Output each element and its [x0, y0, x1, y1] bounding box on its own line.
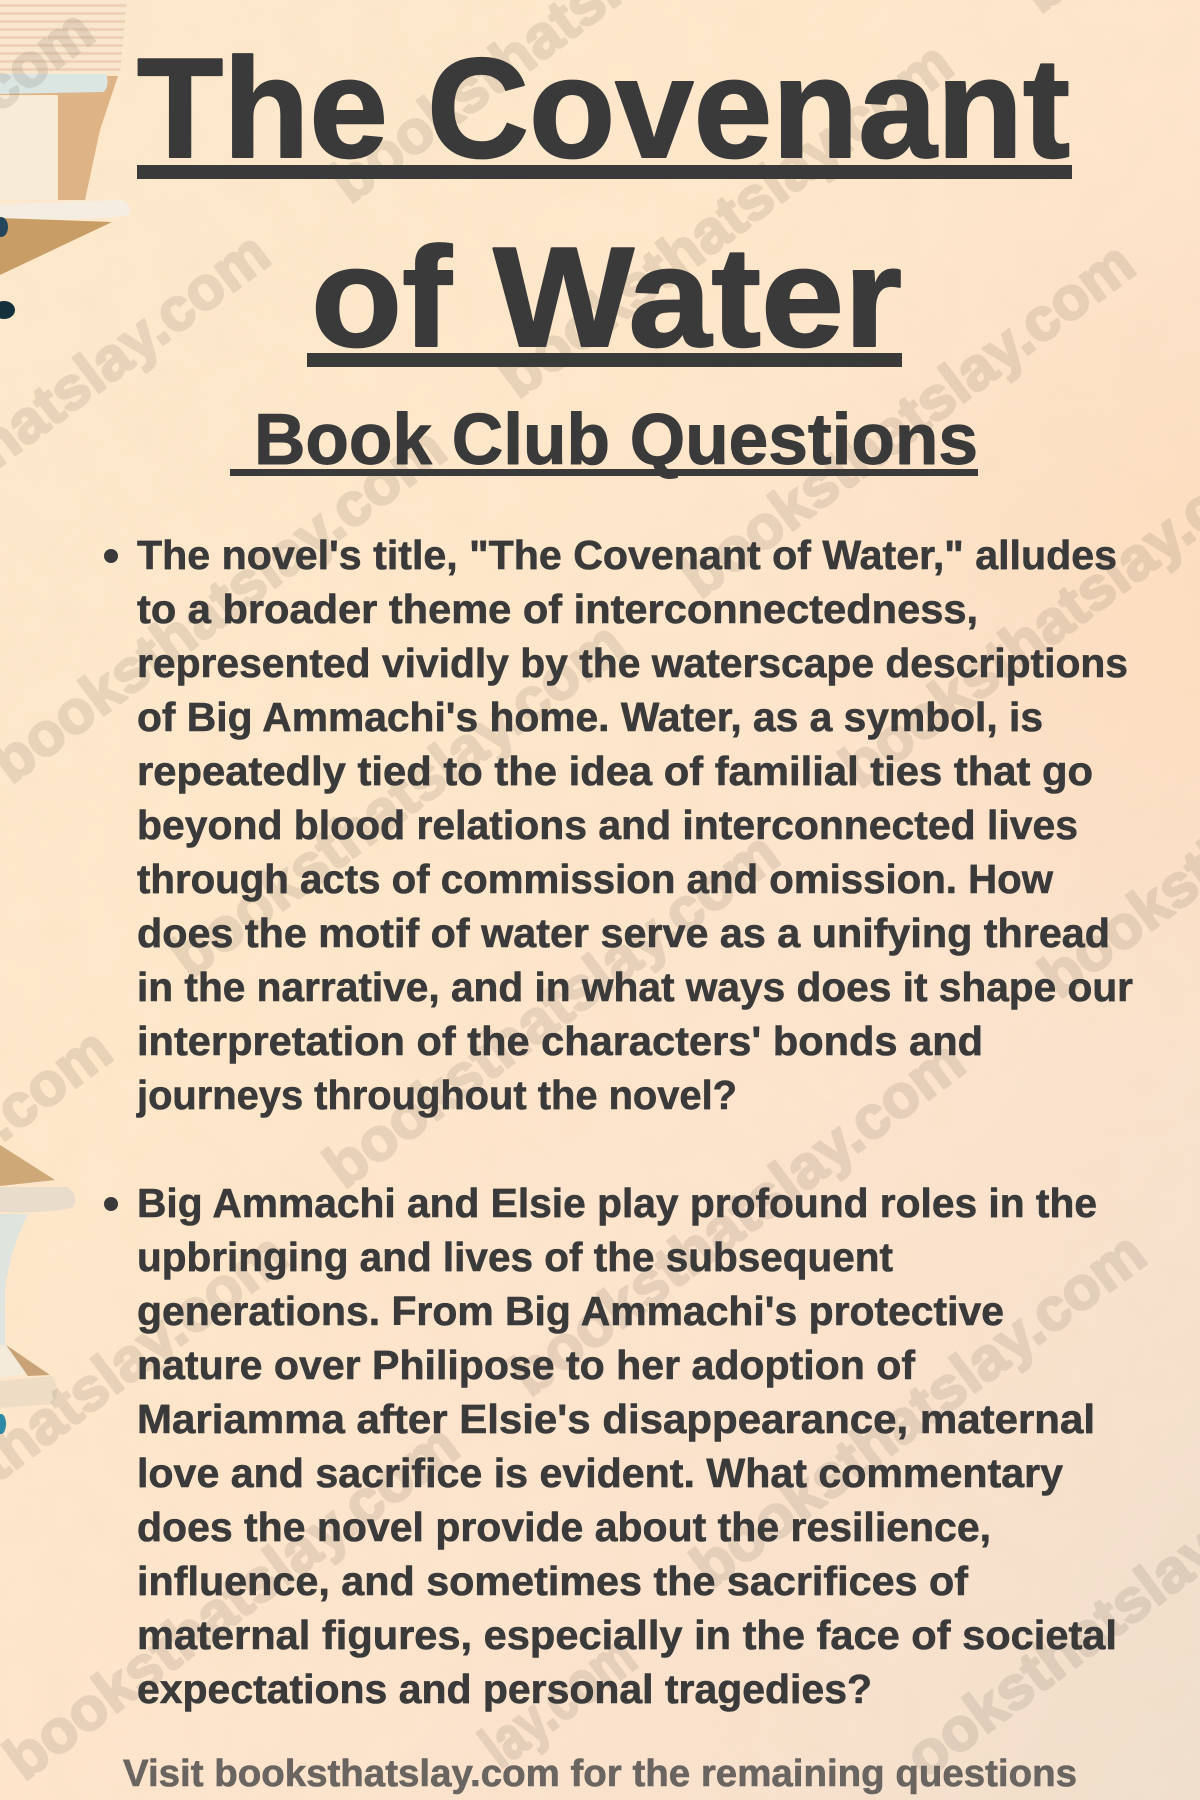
watermarks: booksthatslay.com [679, 1218, 1158, 1600]
question 2: upbringing and lives of the subsequent [137, 1234, 893, 1280]
question 2 [104, 1180, 1117, 1712]
watermarks: booksthatslay.com [486, 28, 965, 410]
question 2: maternal figures, especially in the face of societal [137, 1612, 1117, 1658]
question 1: in the narrative, and in what ways does it shape our [137, 964, 1133, 1010]
question 2: influence, and sometimes the sacrifices of [137, 1558, 968, 1604]
watermarks: booksthatslay.com [312, 818, 791, 1200]
watermarks: lay.com [468, 1622, 648, 1780]
footer call to action: Visit booksthatslay.com for the remaining questions [123, 1753, 1077, 1795]
question 1: of Big Ammachi's home. Water, as a symbol, is [137, 694, 1043, 740]
question 1: represented vividly by the waterscape descriptions [137, 640, 1128, 686]
watermarks: booksthatslay.com [668, 228, 1147, 610]
question 1: beyond blood relations and interconnected lives [137, 802, 1078, 848]
question 2: generations. From Big Ammachi's protective [137, 1288, 1004, 1334]
question 2: nature over Philipose to her adoption of [137, 1342, 915, 1388]
decorative book stack: top left [0, 0, 130, 319]
title: of Water [311, 218, 902, 377]
question 1: to a broader theme of interconnectedness, [137, 586, 978, 632]
question 1 [104, 532, 1133, 1118]
decorative book stack: lower left [0, 1145, 75, 1434]
question 1: The novel's title, "The Covenant of Water," alludes [137, 532, 1117, 578]
subtitle: Book Club Questions [254, 400, 978, 480]
question 1: journeys throughout the novel? [136, 1072, 737, 1118]
title [137, 29, 1072, 377]
watermarks: booksthatslay.com [498, 1026, 977, 1408]
question 2: does the novel provide about the resilience, [137, 1504, 991, 1550]
watermarks: booksthatslay.com [158, 608, 637, 990]
question 1: does the motif of water serve as a unifying thread [137, 910, 1110, 956]
question 2: expectations and personal tragedies? [137, 1666, 872, 1712]
title: The Covenant [137, 29, 1070, 188]
question 2: love and sacrifice is evident. What commentary [137, 1450, 1063, 1496]
question 1: through acts of commission and omission. How [137, 856, 1053, 902]
question 1: interpretation of the characters' bonds and [137, 1018, 983, 1064]
question 2: Mariamma after Elsie's disappearance, maternal [137, 1396, 1095, 1442]
watermarks: booksthatslay.com [0, 1410, 471, 1792]
question 2: Big Ammachi and Elsie play profound roles in the [137, 1180, 1097, 1226]
question 1: repeatedly tied to the idea of familial ties that go [137, 748, 1093, 794]
